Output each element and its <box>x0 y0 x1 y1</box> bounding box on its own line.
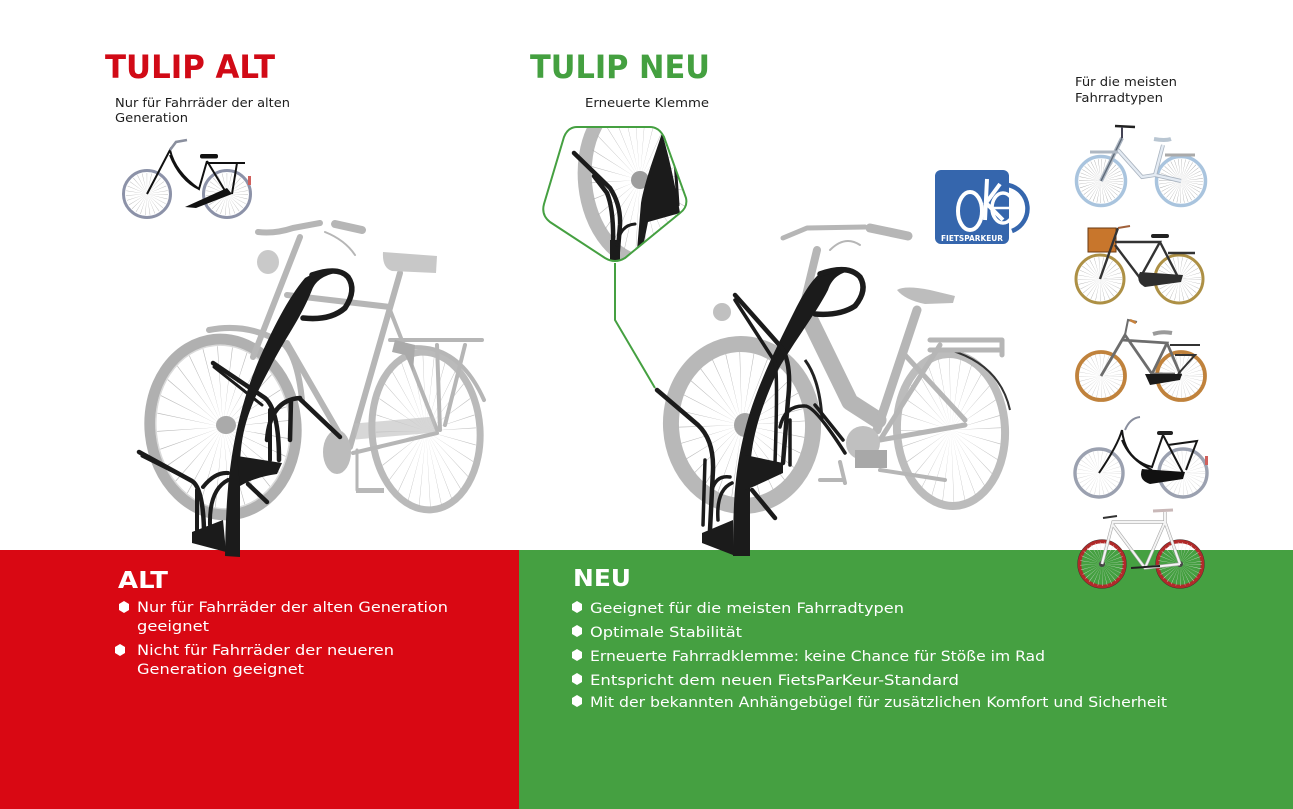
bicycle: old <box>141 223 485 522</box>
list: neu benefits: Erneuerte Fahrradklemme: keine Chance für Stöße im Rad <box>590 649 1045 665</box>
panel: alt <box>0 550 519 809</box>
heading: alt: ALT <box>118 568 168 594</box>
list: alt drawbacks <box>115 600 448 678</box>
title: tulip neu: TULIP NEU <box>530 48 710 86</box>
text: most bicycle types: Fahrradtypen <box>1075 91 1163 105</box>
text: most bicycle types <box>1075 75 1177 105</box>
list: neu benefits: Optimale Stabilität <box>590 625 742 641</box>
text: old generation note: Generation <box>115 111 188 125</box>
icon: fietsparkeur logo <box>935 170 1027 244</box>
list: neu benefits: Geeignet für die meisten Fahrradtypen <box>590 601 904 617</box>
text: most bicycle types: Für die meisten <box>1075 75 1177 89</box>
list: alt drawbacks: Nicht für Fahrräder der neueren <box>137 643 394 659</box>
text: old generation note: Nur für Fahrräder der alten <box>115 96 290 110</box>
bike rack: old <box>139 270 352 557</box>
illustration: new bicycle with rack <box>657 227 1010 556</box>
panel: neu <box>519 550 1293 809</box>
icon: white bike red tires <box>1078 510 1204 588</box>
text: renewed clamp: Erneuerte Klemme <box>585 96 709 110</box>
list: neu benefits: Mit der bekannten Anhängebügel für zusätzlichen Komfort und Sicherheit <box>590 695 1167 711</box>
title: tulip alt: TULIP ALT <box>105 48 275 86</box>
list: alt drawbacks: Generation geeignet <box>137 662 304 678</box>
bike rack: new <box>657 267 863 556</box>
icon: carrier bike with crate <box>1076 226 1203 303</box>
bicycle: new <box>666 227 1010 511</box>
icon: gray bike with orange tires <box>1077 320 1205 400</box>
icon: fietsparkeur logo: FIETSPARKEUR <box>941 234 1003 243</box>
illustration: old bicycle with rack <box>139 223 485 557</box>
callout: clamp detail <box>542 126 688 388</box>
callout leader line <box>615 263 655 388</box>
list: alt drawbacks: Nur für Fahrräder der alten Generation <box>137 600 448 616</box>
icon: small old bike <box>124 140 251 218</box>
heading: neu: NEU <box>573 566 631 592</box>
list: neu benefits <box>572 601 1167 711</box>
list: neu benefits: Entspricht dem neuen FietsParKeur-Standard <box>590 673 959 689</box>
icon: black dutch bike <box>1075 417 1208 497</box>
icon: city bike blue <box>1076 126 1206 206</box>
callout image: clamp closeup <box>572 128 684 260</box>
text: old generation note <box>115 96 290 125</box>
list: alt drawbacks: geeignet <box>137 619 209 635</box>
